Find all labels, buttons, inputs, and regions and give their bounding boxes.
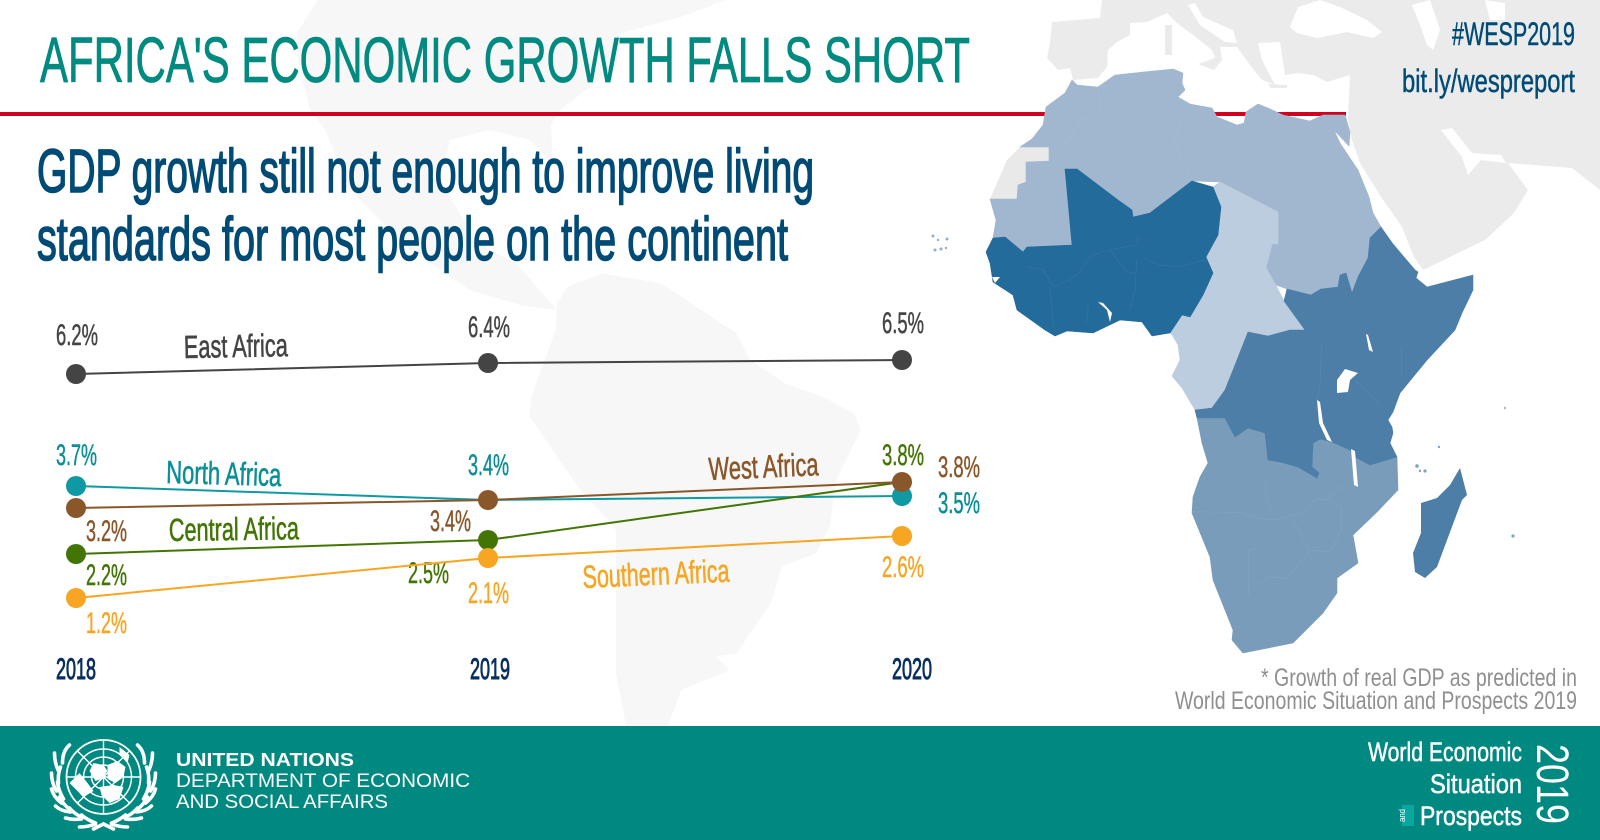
publication logo: World Economic: [1368, 737, 1522, 767]
organisation name: UNITED NATIONS: [176, 750, 354, 770]
series: West Africa: West Africa: [708, 446, 819, 487]
series: East Africa: East Africa: [183, 327, 288, 365]
series: Central Africa: [66, 439, 924, 592]
region: East Africa: [1195, 227, 1473, 478]
icon: United Nations emblem: [52, 740, 156, 829]
small islands: [1415, 407, 1515, 538]
series: Southern Africa: 2.1%: [468, 577, 509, 610]
map: Cape Verde islands: [932, 234, 948, 252]
subtitle: GDP growth still not enough to improve living: [37, 137, 814, 205]
publication logo: Prospects: [1420, 801, 1522, 831]
series: East Africa: 6.4%: [468, 311, 510, 344]
series: West Africa: 3.2%: [86, 515, 127, 548]
line chart: GDP growth by region: [56, 307, 980, 686]
lakes: [992, 277, 1373, 487]
region: North Africa: [990, 69, 1381, 295]
series: Central Africa: 2.2%: [86, 559, 127, 592]
title: AFRICA'S ECONOMIC GROWTH FALLS SHORT: [40, 24, 970, 96]
series: Central Africa: Central Africa: [169, 510, 299, 548]
map: Europe, Middle East and Asia: [1047, 0, 1600, 270]
red header rule: [0, 112, 1346, 116]
x axis years: 2019: [470, 653, 510, 686]
series: East Africa: [56, 307, 924, 384]
series: Southern Africa: Southern Africa: [582, 553, 730, 595]
series: West Africa: [66, 446, 980, 548]
background world map: [297, 0, 1600, 727]
series: North Africa: 3.5%: [938, 487, 980, 520]
series: North Africa: 3.4%: [468, 449, 509, 482]
series: Southern Africa: 1.2%: [86, 607, 127, 640]
series: North Africa: 3.7%: [56, 439, 97, 472]
organisation name: [176, 750, 470, 813]
series: West Africa: 3.8%: [938, 451, 980, 484]
subtitle: standards for most people on the continent: [37, 205, 788, 273]
series: Central Africa: 3.8%: [882, 439, 924, 472]
map: North America silhouette: [297, 0, 725, 310]
x axis years: 2020: [892, 653, 932, 686]
series: Southern Africa: 2.6%: [882, 551, 924, 584]
wreath: left branch: [52, 745, 104, 829]
series: Central Africa: 2.5%: [408, 557, 449, 590]
region: Central Africa: [1170, 182, 1305, 410]
country borders: [1027, 87, 1402, 597]
footer band: [0, 726, 1600, 840]
region: Southern Africa: [1192, 418, 1398, 653]
region: Western Sahara: [990, 147, 1049, 199]
x axis years: [56, 653, 932, 686]
region: Madagascar: [1413, 468, 1467, 578]
wreath: right branch: [104, 745, 156, 829]
region: West Africa: [986, 169, 1221, 336]
series: West Africa: 3.4%: [430, 505, 471, 538]
organisation name: DEPARTMENT OF ECONOMIC: [176, 770, 470, 792]
subtitle: [37, 137, 814, 273]
badge: and: [1397, 805, 1414, 826]
map: South America silhouette: [530, 273, 861, 727]
series: Southern Africa: [66, 526, 924, 640]
publication logo: [1368, 737, 1578, 831]
series: East Africa: 6.2%: [56, 319, 98, 352]
map of Africa by region: [986, 69, 1515, 653]
organisation name: AND SOCIAL AFFAIRS: [176, 791, 388, 813]
series: East Africa: 6.5%: [882, 307, 924, 340]
publication logo: Situation: [1430, 769, 1522, 799]
series: North Africa: [56, 439, 980, 520]
badge: and: and: [1397, 809, 1407, 822]
x axis years: 2018: [56, 653, 96, 686]
footnote: [1175, 664, 1577, 715]
series: North Africa: North Africa: [166, 454, 282, 493]
